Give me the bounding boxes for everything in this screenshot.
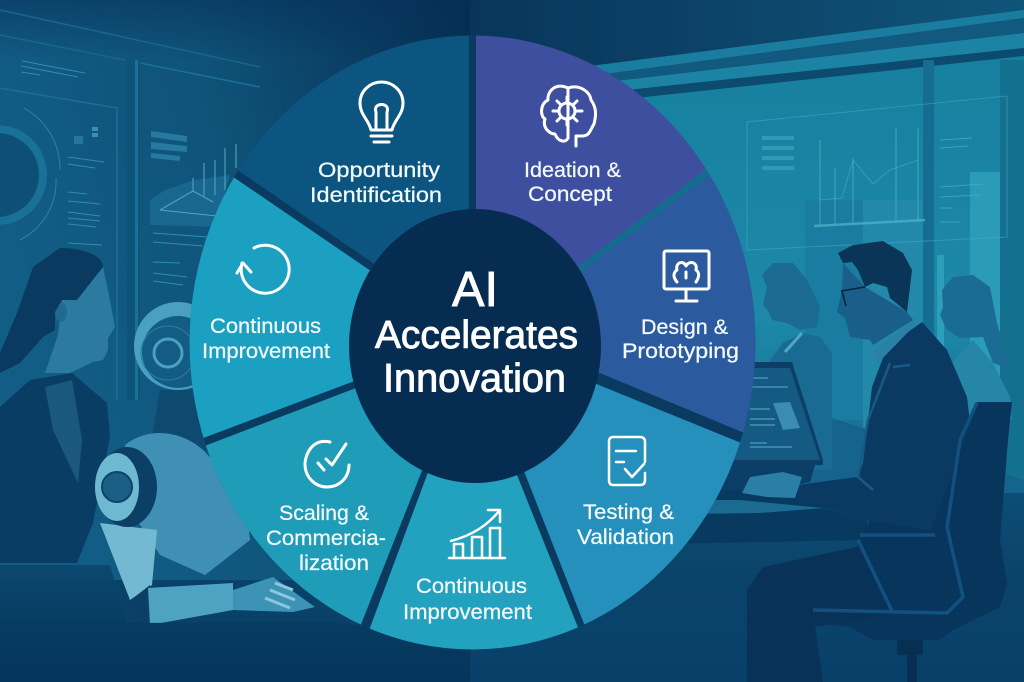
background: ceiling stripes [590, 10, 1024, 103]
label: Continuous Improvement bottom [403, 574, 532, 624]
label: Continuous Improvement bottom: Continuous [416, 574, 527, 598]
label: Testing & Validation [577, 500, 674, 549]
segment: Opportunity Identification [238, 36, 469, 264]
icon: growth chart [449, 510, 505, 558]
label: Scaling & Commercialization: lization [299, 551, 369, 575]
icon: checklist document [609, 437, 645, 485]
background: left woman [0, 248, 115, 563]
icon: target check [305, 441, 349, 487]
gap highlight [578, 170, 710, 272]
label: Scaling & Commercialization [266, 501, 386, 575]
segment: Design & Prototyping [581, 176, 756, 432]
label: Design & Prototyping: Prototyping [622, 339, 739, 363]
background: holographic chart panel [747, 96, 1007, 250]
title: Innovation [383, 356, 566, 400]
label: Design & Prototyping [622, 315, 739, 363]
segment: Scaling & Commercialization [206, 388, 422, 624]
icon: monitor [664, 251, 709, 301]
background: robot [95, 302, 315, 625]
background: left desk [0, 565, 470, 682]
label: Ideation & Concept: Ideation & [524, 158, 621, 182]
background: right desk [600, 490, 867, 545]
background: distant woman two [940, 275, 1012, 420]
label: Testing & Validation: Validation [577, 525, 674, 549]
background: left wall panels [0, 10, 260, 400]
segment: Ideation & Concept [476, 36, 706, 267]
label: Opportunity Identification [310, 158, 442, 207]
label: Continuous Improvement left: Continuous [210, 314, 321, 338]
label: Continuous Improvement left: Improvement [202, 339, 330, 363]
segment: Continuous Improvement bottom [370, 473, 578, 650]
icon: refresh arrow [237, 245, 289, 293]
label: Continuous Improvement left [202, 314, 330, 363]
label: Scaling & Commercialization: Scaling & [279, 501, 369, 525]
title: Accelerates [375, 314, 578, 357]
title [375, 263, 578, 400]
label: Ideation & Concept [524, 158, 621, 206]
icon: light bulb [360, 82, 403, 142]
segment: Continuous Improvement left [190, 178, 370, 438]
center hub [349, 209, 601, 483]
background: man at desk [742, 241, 1012, 682]
label: Scaling & Commercialization: Commercia- [266, 526, 386, 550]
wheel base [190, 36, 756, 650]
label: Opportunity Identification: Identification [310, 183, 442, 207]
title: AI [452, 263, 498, 317]
background: right windows [470, 56, 1024, 682]
icon: brain with gear [542, 86, 596, 146]
label: Opportunity Identification: Opportunity [318, 158, 440, 182]
label: Continuous Improvement bottom: Improvement [403, 600, 532, 624]
label: Ideation & Concept: Concept [528, 182, 612, 206]
segment: Testing & Validation [524, 384, 740, 624]
label: Design & Prototyping: Design & [641, 315, 728, 339]
background: distant woman one [762, 263, 832, 470]
label: Testing & Validation: Testing & [583, 500, 674, 524]
background: laptop [700, 362, 823, 490]
process wheel [190, 36, 756, 650]
